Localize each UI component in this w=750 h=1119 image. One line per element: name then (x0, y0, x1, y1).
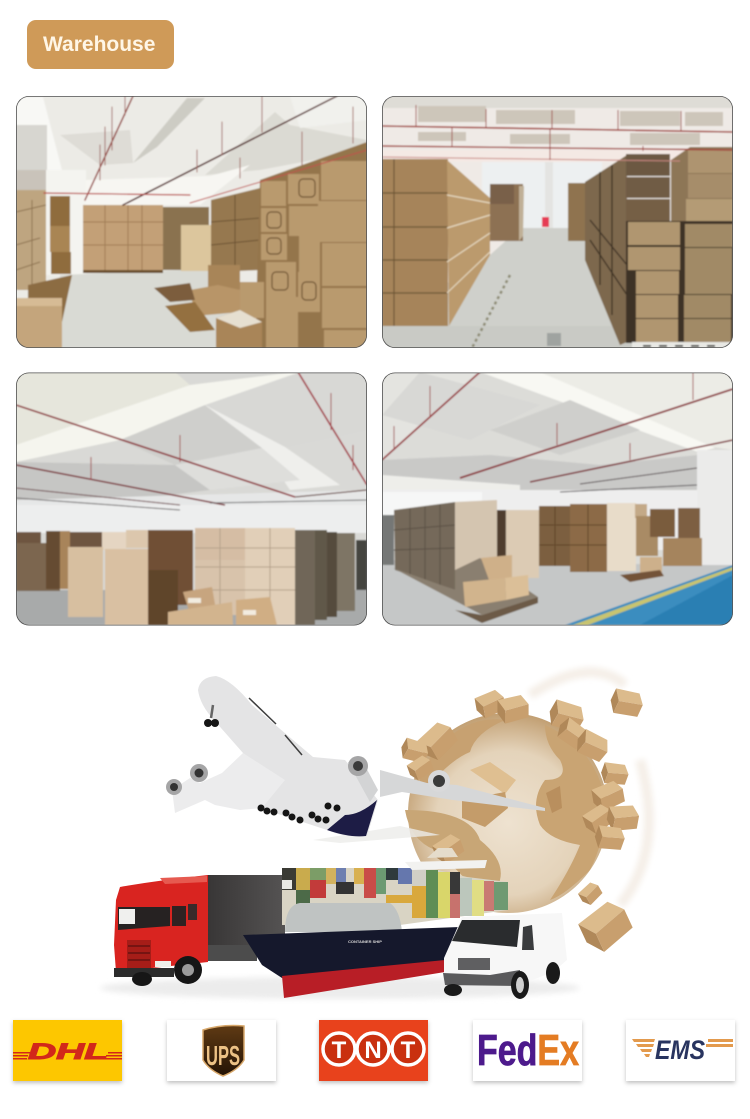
photo panel: warehouse aisle with stacked cartons (16, 96, 367, 348)
courier logo: TNT (319, 1020, 428, 1081)
icon: container ship (243, 848, 508, 998)
photo panel: wrapped pallets under high ceiling with red pipes (16, 372, 367, 626)
courier logo: TNT: T (401, 1037, 416, 1064)
courier logo: UPS (167, 1020, 276, 1081)
courier logo: UPS: UPS (206, 1040, 240, 1071)
photo panel: pallets beside blue epoxy floor (382, 372, 733, 626)
icon: truck (114, 875, 285, 986)
courier logo: DHL: DHL (28, 1039, 108, 1064)
icon: globe with cartons (397, 684, 647, 957)
icon: delivery van (443, 913, 567, 999)
icon: airplane (166, 676, 545, 843)
photo panel: aisle between tall carton stacks (382, 96, 733, 348)
courier logo: EMS (626, 1020, 735, 1081)
heading badge: Warehouse: Warehouse (43, 33, 155, 56)
motion swooshes around globe (530, 672, 649, 905)
courier logo: TNT: T (332, 1037, 347, 1064)
cartons on globe (397, 684, 647, 957)
ground shadow (100, 977, 580, 999)
transport illustration: plane, globe, truck, ship and van (100, 672, 649, 999)
icon: container ship: CONTAINER SHIP (348, 939, 382, 944)
courier logo: FedEx: FedEx (477, 1026, 579, 1075)
courier logo: TNT: N (364, 1037, 382, 1064)
courier logo: EMS: EMS (655, 1035, 705, 1065)
heading badge: Warehouse (27, 20, 174, 69)
courier logo: DHL (13, 1020, 122, 1081)
